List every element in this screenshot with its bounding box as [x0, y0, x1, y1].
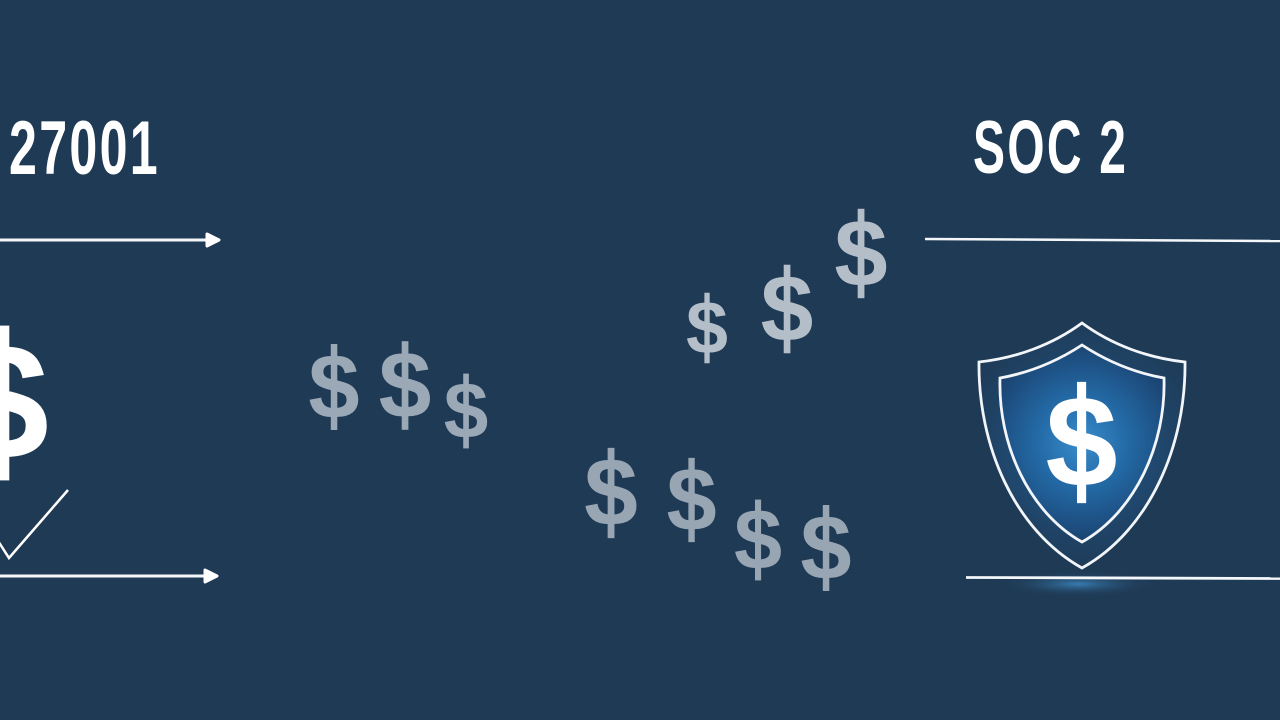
- dollar 3: $: [444, 366, 488, 455]
- dollar 9: $: [734, 492, 782, 588]
- shield outer outline: [979, 323, 1185, 568]
- heading: SOC 2: SOC 2: [973, 106, 1128, 190]
- group: lower dollar signs: [584, 440, 852, 599]
- dollar 10: $: [800, 497, 852, 599]
- dollar 1: $: [308, 336, 360, 438]
- shield inner panel: [1000, 345, 1164, 542]
- dollar 7: $: [584, 440, 638, 547]
- heading: 27001: 27001: [9, 106, 160, 191]
- icon: check mark: [0, 490, 68, 558]
- icon: shield with dollar: [979, 323, 1185, 568]
- arrow: bottom left: [0, 570, 217, 582]
- group: rising dollar signs: [686, 200, 888, 369]
- dollar 2: $: [379, 332, 431, 438]
- dollar 4: $: [686, 285, 728, 369]
- glow under shield: [998, 571, 1158, 597]
- shield dollar sign: $: [1045, 370, 1118, 514]
- line: SOC 2 top: [925, 239, 1280, 241]
- group: left dollar signs: [308, 332, 488, 455]
- dollar 8: $: [666, 449, 717, 550]
- arrow: top left: [0, 234, 219, 246]
- dollar 5: $: [761, 256, 813, 362]
- dollar 6: $: [834, 200, 888, 307]
- line: SOC 2 bottom: [966, 578, 1280, 579]
